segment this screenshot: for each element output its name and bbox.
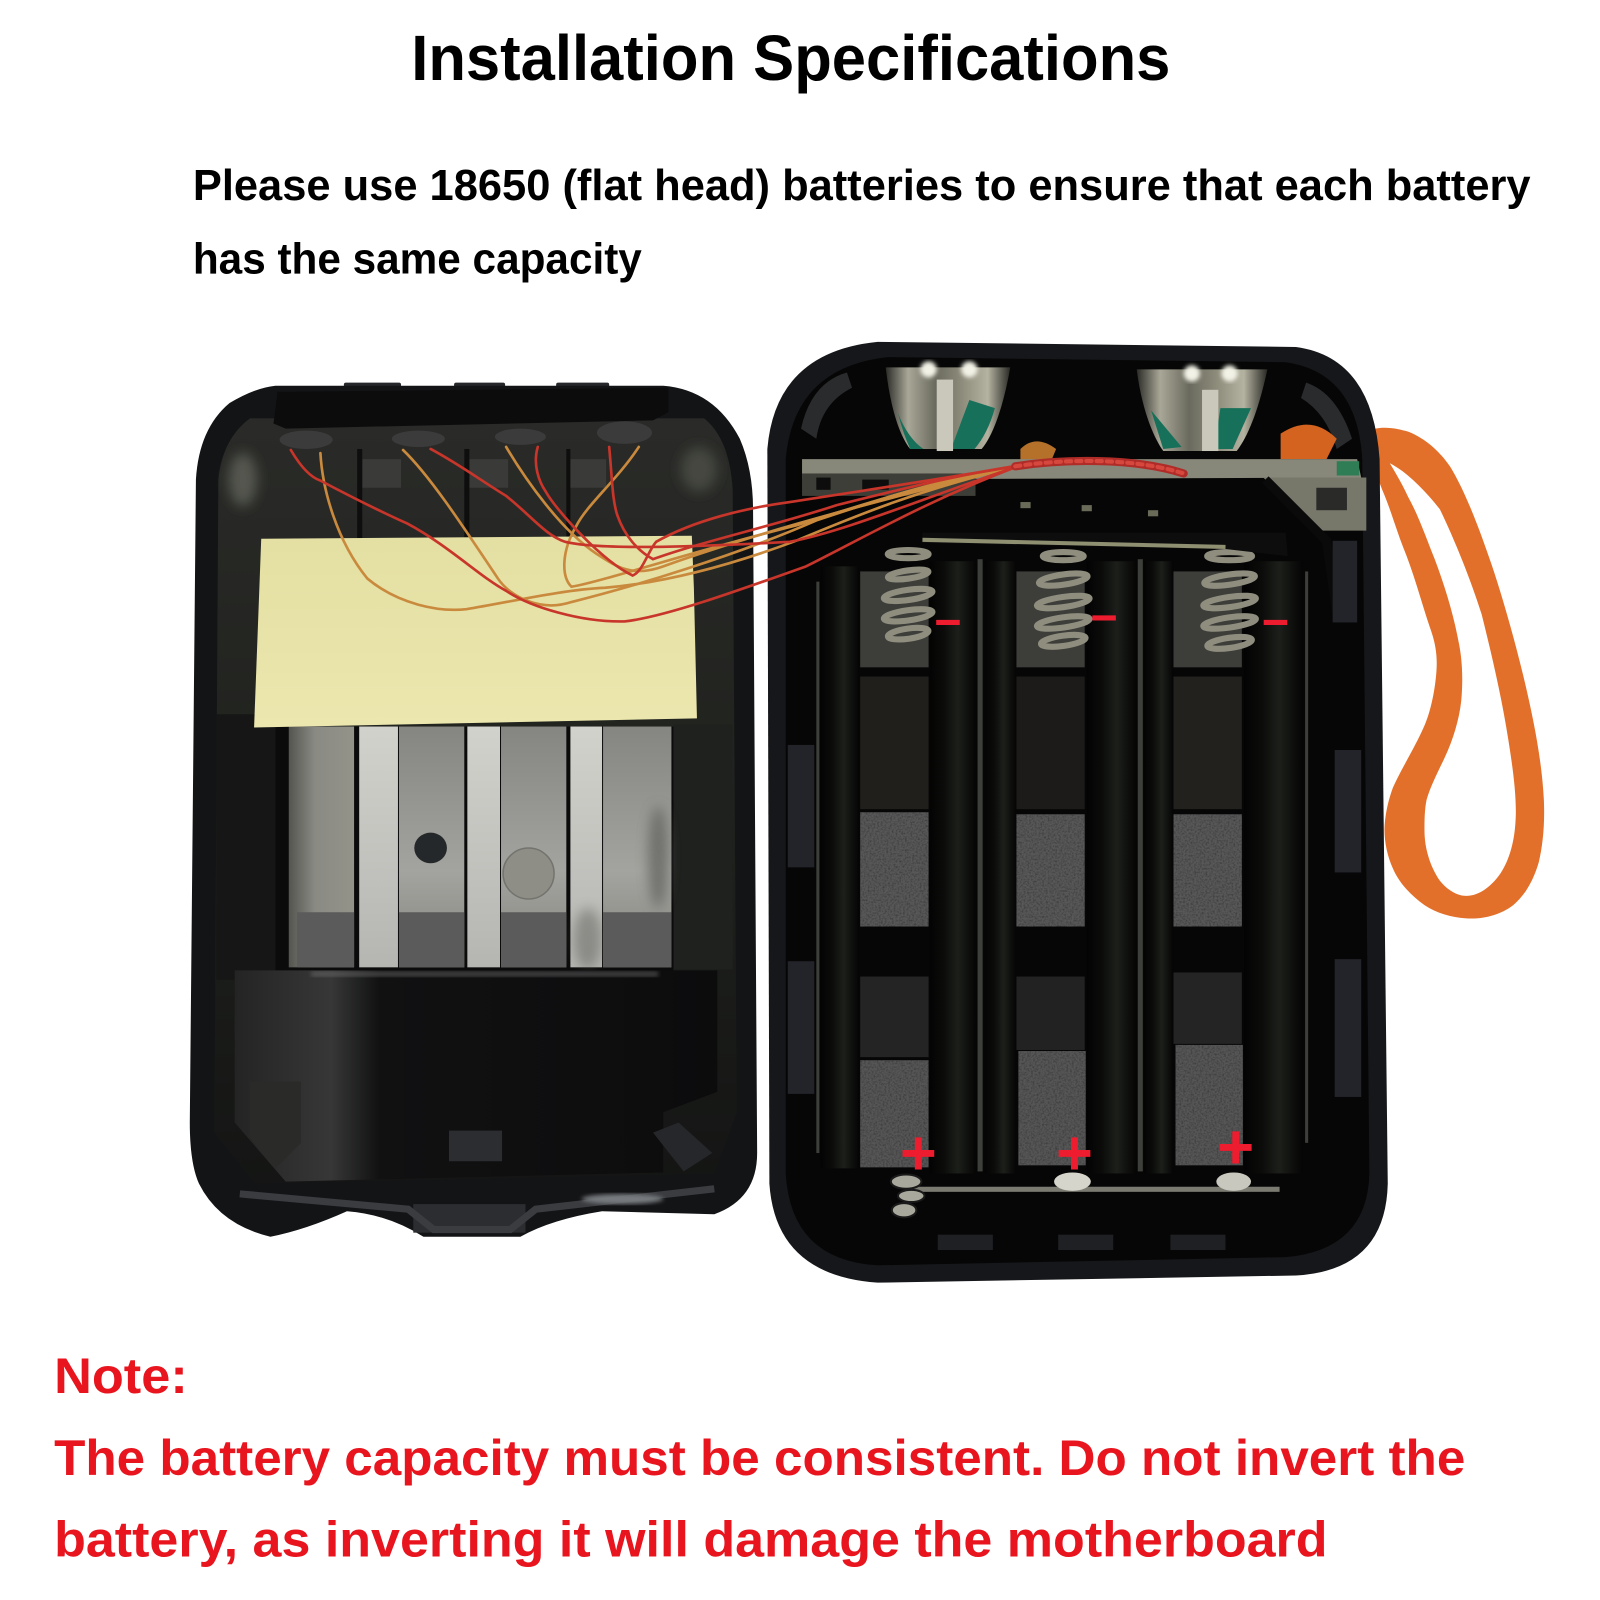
round mark [503, 848, 554, 899]
wires: bundle between cover and board [291, 447, 1184, 621]
orange wires [320, 447, 1020, 610]
note: red warning text: battery, as inverting it will damage the motherboard [54, 1512, 1328, 1568]
polarity marks: plus: + [1056, 1118, 1093, 1188]
twisted wire bundle [1015, 461, 1184, 473]
round hole [414, 833, 447, 863]
text block: battery instruction: Please use 18650 (flat head) batteries to ensure that each battery [193, 161, 1531, 210]
title: Installation Specifications [411, 22, 1170, 94]
bottom contact bar and solder points [891, 1172, 1280, 1217]
upper channels [362, 459, 606, 488]
case shell [767, 342, 1388, 1283]
note: red warning text [54, 1348, 1465, 1568]
case interior [786, 357, 1369, 1265]
battery bay: column 3 [1173, 571, 1243, 1165]
text block: battery instruction: has the same capacity [193, 234, 642, 283]
side clips [788, 541, 1361, 1097]
case floor [214, 418, 737, 1184]
battery bay: column 2 [1016, 571, 1086, 1165]
note: red warning text: Note: [54, 1348, 188, 1404]
polarity marks: minus: − [1090, 592, 1118, 644]
top black bar [273, 388, 668, 429]
case shell [190, 386, 757, 1237]
battery ridges [820, 561, 1303, 1173]
polarity marks: minus: − [934, 596, 962, 648]
panel: left case cover [190, 383, 757, 1237]
top tabs [344, 383, 609, 397]
strap: orange rubber band [1376, 428, 1544, 919]
bottom slots [938, 1235, 1226, 1250]
corner details [801, 372, 1352, 449]
yellow tape [254, 536, 697, 728]
panel: right case with battery bays [767, 342, 1388, 1283]
circuit board [802, 459, 1366, 612]
polarity marks: plus: + [900, 1118, 937, 1188]
battery bay: column 1 [860, 571, 929, 1167]
polarity marks: minus [934, 592, 1289, 648]
red wires [291, 447, 1020, 621]
polarity marks: minus: − [1262, 596, 1289, 648]
top contact bar [922, 533, 1288, 556]
springs [883, 550, 1257, 651]
bottom plate [235, 970, 717, 1182]
speaker terminals [886, 361, 1267, 451]
text block: battery instruction [193, 161, 1531, 283]
polarity marks: plus [900, 1112, 1254, 1188]
orange tag [1281, 425, 1337, 459]
note: red warning text: The battery capacity must be consistent. Do not invert the [54, 1430, 1465, 1486]
polarity marks: plus: + [1217, 1112, 1254, 1182]
bottom latch [413, 1131, 526, 1233]
bottom rim [240, 1189, 714, 1230]
metal strips [276, 727, 673, 971]
wire pads [280, 421, 652, 449]
